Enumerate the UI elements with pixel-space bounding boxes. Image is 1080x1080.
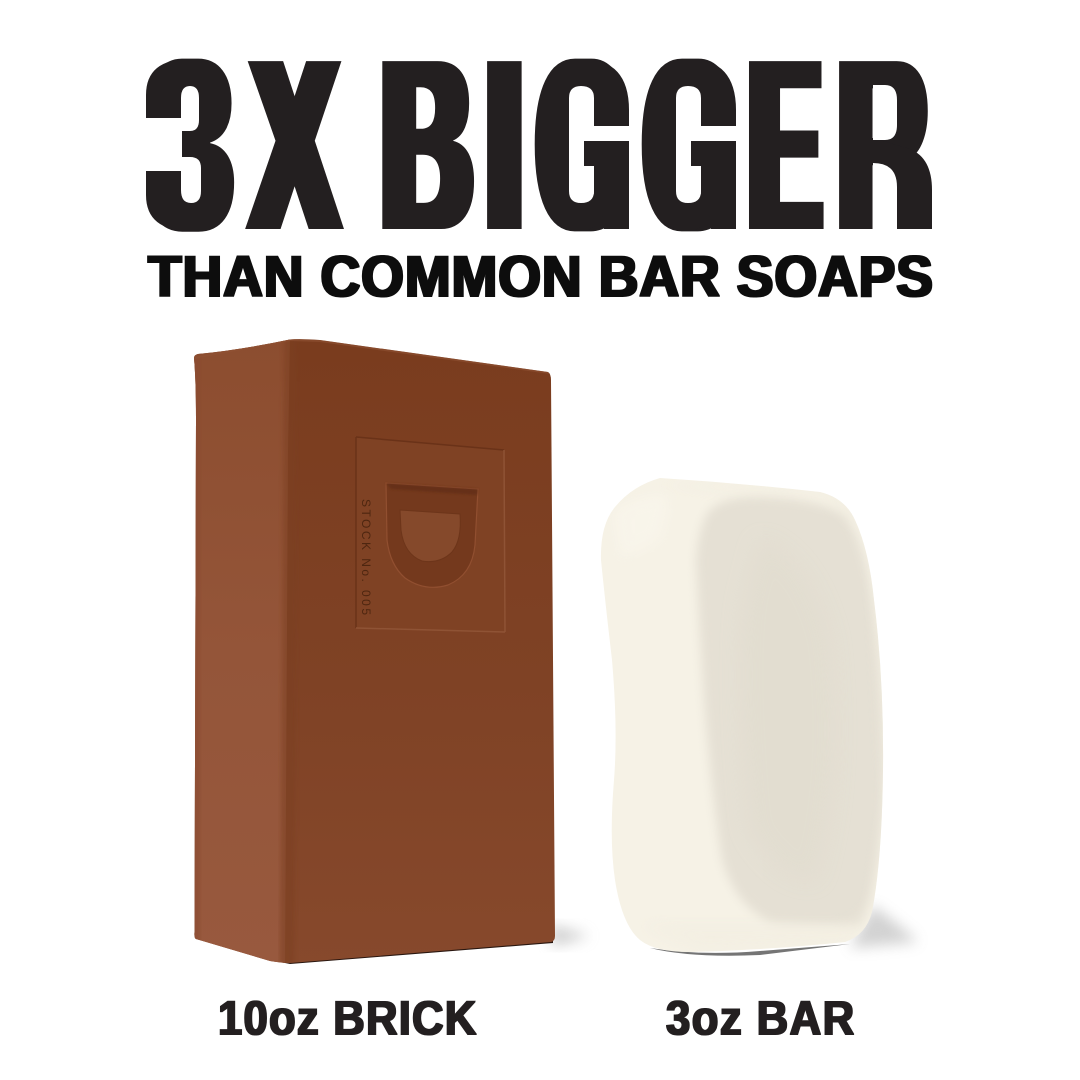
label: 10oz BRICK: 10oz BRICK (218, 990, 476, 1045)
icon: 3oz bar soap (595, 475, 890, 957)
shadow: bar (850, 905, 918, 948)
title: 3X BIGGER (138, 8, 932, 282)
embossed label panel (356, 437, 505, 632)
brick top edge highlight (194, 340, 550, 373)
subtitle: than common bar soaps: THAN COMMON BAR SOAPS (148, 245, 933, 310)
stock number: STOCK No. 005 (359, 499, 373, 615)
title: 3X BIGGER: I (486, 9, 522, 282)
title: 3X BIGGER: R (839, 9, 926, 281)
title: 3X BIGGER: B (382, 10, 472, 282)
embossed D logo (386, 483, 478, 587)
title: 3X BIGGER: X (252, 10, 337, 282)
title: 3X BIGGER: 3 (150, 8, 231, 281)
shadow: brick (550, 925, 590, 946)
title: 3X BIGGER: G (645, 9, 734, 281)
label: 3oz BAR: 3oz BAR (666, 990, 854, 1045)
title: 3X BIGGER: G (538, 9, 627, 281)
title: 3X BIGGER: E (750, 8, 820, 281)
bar face (696, 497, 884, 925)
icon: 10oz brick soap (186, 335, 560, 968)
